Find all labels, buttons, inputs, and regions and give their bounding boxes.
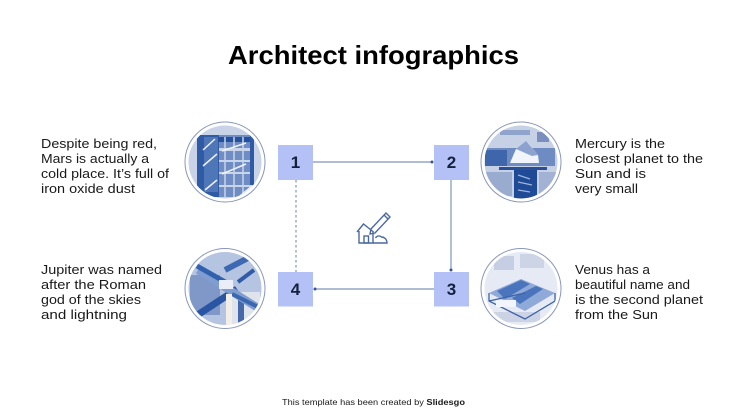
image: roof plan	[481, 248, 561, 328]
text block 1: Despite being red,	[41, 136, 157, 151]
text block 1: Mars is actually a	[41, 151, 150, 166]
text block 1: iron oxide dust	[41, 181, 135, 196]
text block 3: is the second planet	[575, 292, 703, 307]
number box 1	[278, 145, 313, 180]
text block 1: cold place. It’s full of	[41, 166, 169, 181]
image: house section	[481, 122, 561, 202]
connector: 1 to 2	[313, 160, 434, 164]
text block 2: very small	[575, 181, 638, 196]
image: steel joint	[185, 248, 265, 332]
icon: house and pencil	[357, 213, 390, 243]
text block 4: god of the skies	[41, 292, 142, 307]
number box 4	[278, 272, 313, 306]
connector: 4 to 1 dashed	[295, 180, 297, 272]
footer credit: This template has been created by Slidesgo	[282, 397, 465, 407]
number box 2: 2	[447, 153, 456, 172]
text block 2: Mercury is the	[575, 136, 665, 151]
text block 3: beautiful name and	[575, 277, 690, 292]
number box 3: 3	[447, 280, 456, 299]
text block 3: from the Sun	[575, 307, 658, 322]
text block 3: Venus has a	[575, 262, 651, 277]
text block 4: and lightning	[41, 307, 127, 322]
text block 4: after the Roman	[41, 277, 146, 292]
text block 2: closest planet to the	[575, 151, 703, 166]
number box 1: 1	[291, 153, 300, 172]
number box 2	[434, 145, 469, 180]
image: building facade	[185, 122, 265, 202]
connector: 2 to 3	[450, 180, 452, 272]
connector: 3 to 4	[314, 288, 434, 290]
text block 4: Jupiter was named	[41, 262, 162, 277]
title: Architect infographics	[228, 40, 519, 70]
number box 4: 4	[291, 280, 301, 299]
number box 3	[434, 272, 469, 306]
text block 2: Sun and is	[575, 166, 647, 181]
